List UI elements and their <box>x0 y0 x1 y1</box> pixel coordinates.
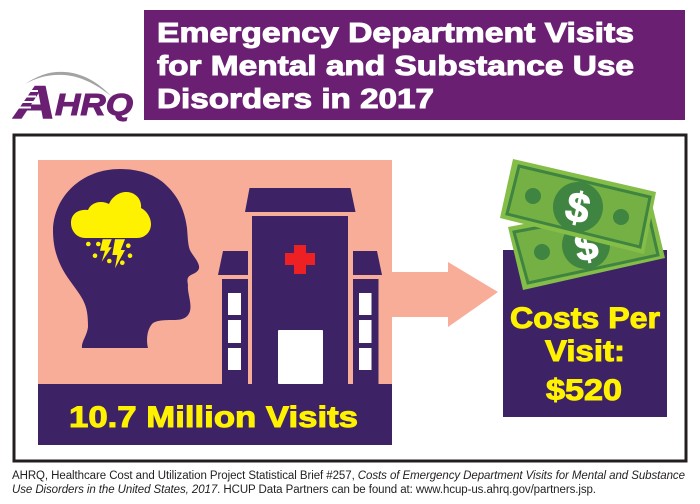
left wing roof <box>218 251 248 275</box>
main building <box>252 216 348 384</box>
cost value: $520 <box>546 374 622 407</box>
rain drops <box>86 242 132 265</box>
arrow <box>392 262 498 327</box>
source line 2: Use Disorders in the United States, 2017. HCUP Data Partners can be found at: www.hcup-us.ahrq.gov/partners.jsp. <box>12 484 596 496</box>
icon: hospital <box>218 188 382 384</box>
visits label: 10.7 Million Visits <box>69 401 358 434</box>
title line 1: Emergency Department Visits <box>157 17 634 48</box>
icon: front bill <box>500 159 656 254</box>
logo stripes <box>14 90 38 108</box>
icon: back bill: $ <box>571 223 602 271</box>
icon: back bill <box>508 200 665 290</box>
windows <box>228 293 372 370</box>
icon: head silhouette <box>53 169 199 348</box>
logo letter A: A <box>13 76 56 128</box>
right wing roof <box>353 251 382 275</box>
title line 2: for Mental and Substance Use <box>157 50 634 81</box>
lightning bolts <box>100 239 125 268</box>
pink background <box>38 160 392 384</box>
right wing <box>353 279 378 384</box>
left wing <box>222 279 248 384</box>
costs label line 2: Visit: <box>545 335 625 368</box>
title line 3: Disorders in 2017 <box>157 83 434 114</box>
source note <box>12 470 685 496</box>
cloud <box>71 192 151 238</box>
door <box>278 330 323 384</box>
source line 1: AHRQ, Healthcare Cost and Utilization Project Statistical Brief #257, Costs of Emergency Department Visits for Mental and Substance <box>12 470 685 482</box>
costs box <box>503 250 667 417</box>
logo arc <box>25 72 111 96</box>
main frame <box>14 135 686 461</box>
red cross <box>285 245 315 274</box>
panel: visits <box>38 160 498 445</box>
visits band <box>38 384 392 445</box>
icon: front bill: $ <box>561 182 595 233</box>
logo: AHRQ <box>13 72 133 128</box>
panel: costs <box>500 159 667 417</box>
main roof <box>245 188 356 212</box>
costs label: Costs Per <box>510 302 660 335</box>
logo letters HRQ: HRQ <box>55 87 133 122</box>
icon: storm cloud <box>71 192 151 268</box>
title banner <box>144 10 685 120</box>
